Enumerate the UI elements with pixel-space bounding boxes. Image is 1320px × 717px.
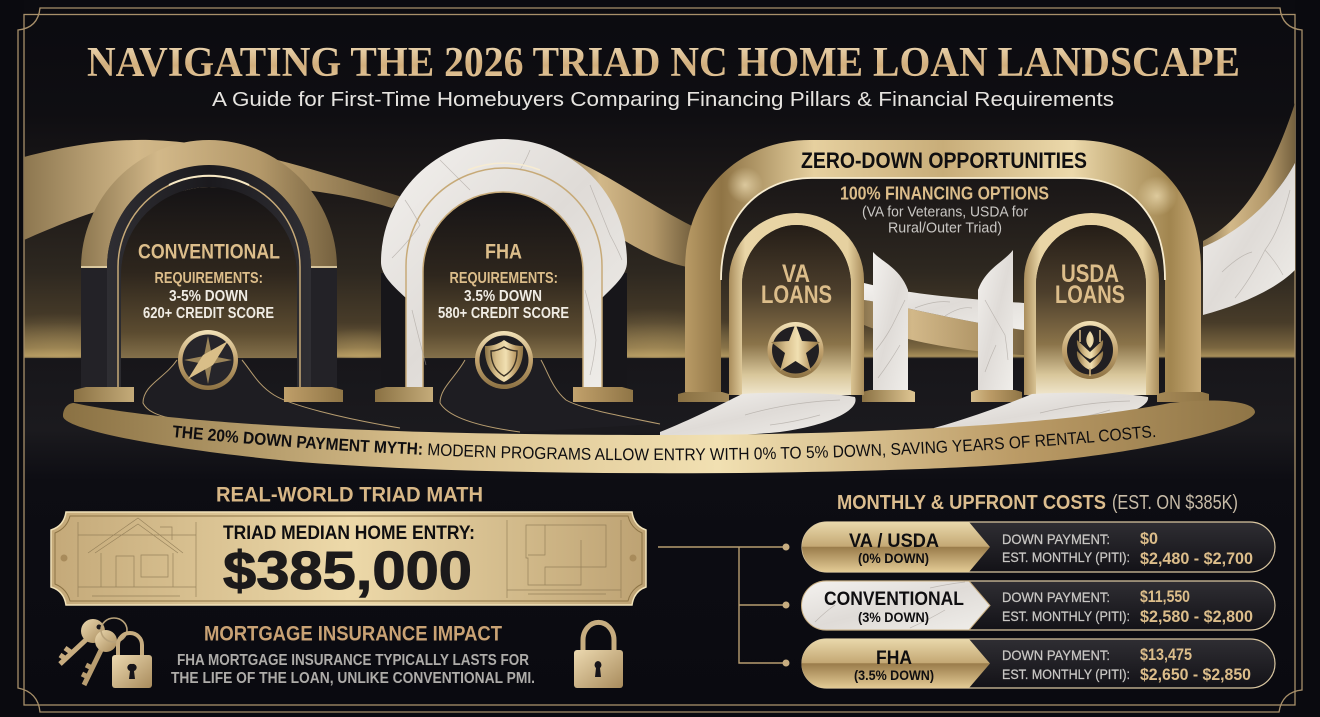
panel: price plaque <box>51 512 646 605</box>
icon: shield <box>475 331 533 389</box>
row: conventional costs: CONVENTIONAL <box>824 589 964 610</box>
marble floor paths <box>660 393 1148 436</box>
row: conventional costs: $11,550 <box>1140 587 1190 606</box>
requirements text: REQUIREMENTS: <box>154 270 263 287</box>
marble pillars <box>862 250 1022 402</box>
USDA label: USDA <box>1061 260 1119 288</box>
icon: house blueprint <box>78 518 196 597</box>
panel: FHA arch <box>375 139 633 402</box>
banner: 20% down payment myth <box>63 400 1255 474</box>
marble outer arch <box>381 139 627 392</box>
row: VA / USDA costs <box>802 522 1275 572</box>
row: conventional costs <box>802 581 1275 630</box>
financing text: 100% FINANCING OPTIONS <box>840 184 1049 204</box>
row: VA / USDA costs: (0% DOWN) <box>858 550 929 566</box>
plaque label: TRIAD MEDIAN HOME ENTRY: <box>223 523 475 544</box>
row: FHA costs <box>802 639 1275 688</box>
VA label: VA <box>782 260 810 288</box>
bases <box>74 387 343 402</box>
banner: 20% down payment myth: THE 20% DOWN PAYMENT MYTH: MODERN PROGRAMS ALLOW ENTRY WITH 0% TO 5% DOWN, SAVING YEARS OF RENTAL COSTS. <box>173 425 1156 460</box>
USDA label <box>1055 260 1125 309</box>
financing text <box>840 184 1049 236</box>
heading: FHA: FHA <box>485 240 522 264</box>
row: conventional costs: DOWN PAYMENT: <box>1002 589 1110 605</box>
subtitle: A Guide for First-Time Homebuyers Comparing Financing Pillars & Financial Requirements <box>212 89 1114 111</box>
flowing ribbons <box>24 103 1295 355</box>
heading: real-world triad math: REAL-WORLD TRIAD MATH <box>216 484 483 506</box>
sub-panel: VA loans <box>729 213 864 395</box>
row: conventional costs: $2,580 - $2,800 <box>1140 607 1253 626</box>
row: VA / USDA costs: $2,480 - $2,700 <box>1140 549 1253 568</box>
row: VA / USDA costs: DOWN PAYMENT: <box>1002 531 1110 547</box>
heading: monthly and upfront costs: MONTHLY & UPFRONT COSTS <box>837 492 1106 514</box>
row: FHA costs: $13,475 <box>1140 645 1192 664</box>
row: FHA costs: DOWN PAYMENT: <box>1002 647 1110 663</box>
row: FHA costs: $2,650 - $2,850 <box>1140 665 1251 684</box>
requirements text <box>143 270 274 322</box>
requirements text: REQUIREMENTS: <box>450 270 558 287</box>
black marble pillars <box>381 273 627 392</box>
heading: monthly and upfront costs: (EST. ON $385K) <box>1112 492 1238 514</box>
panel: zero-down arch <box>678 140 1209 402</box>
floor paths with gold outlines <box>143 358 660 432</box>
heading: mortgage insurance impact: MORTGAGE INSURANCE IMPACT <box>204 622 502 646</box>
big arch bases <box>678 392 1209 402</box>
financing text: Rural/Outer Triad) <box>888 219 1002 236</box>
icon: floor plan blueprint <box>507 520 621 598</box>
text block: mortgage insurance <box>171 652 535 687</box>
row: FHA costs: FHA <box>876 648 912 669</box>
requirements text <box>438 270 569 322</box>
row: conventional costs: (3% DOWN) <box>858 609 929 625</box>
row: VA / USDA costs: EST. MONTHLY (PITI): <box>1002 549 1130 565</box>
icon: wheat <box>1062 321 1118 379</box>
row: VA / USDA costs: $0 <box>1140 529 1158 548</box>
icon: padlock <box>574 622 623 688</box>
heading: conventional: CONVENTIONAL <box>138 240 280 264</box>
requirements text: 580+ CREDIT SCORE <box>438 305 569 322</box>
requirements text: 3.5% DOWN <box>464 288 542 305</box>
icon: compass <box>178 330 238 390</box>
text block: mortgage insurance: FHA MORTGAGE INSURANCE TYPICALLY LASTS FOR <box>177 652 529 669</box>
icon: keys and padlock <box>60 618 152 688</box>
financing text: (VA for Veterans, USDA for <box>862 203 1028 220</box>
USDA label: LOANS <box>1055 281 1125 309</box>
panel: conventional arch <box>74 140 343 402</box>
row: FHA costs: EST. MONTHLY (PITI): <box>1002 666 1130 682</box>
icon: key two <box>82 630 117 685</box>
requirements text: 620+ CREDIT SCORE <box>143 305 274 322</box>
row: conventional costs: EST. MONTHLY (PITI): <box>1002 608 1130 624</box>
icon: star <box>768 322 824 378</box>
requirements text: 3-5% DOWN <box>169 288 248 305</box>
row: FHA costs: (3.5% DOWN) <box>854 667 934 683</box>
VA label: LOANS <box>761 281 832 309</box>
text block: mortgage insurance: THE LIFE OF THE LOAN, UNLIKE CONVENTIONAL PMI. <box>171 670 535 687</box>
icon: key one <box>60 619 105 664</box>
price value: $385,000 <box>223 541 472 601</box>
gold outer arch <box>685 140 1201 392</box>
heading: zero-down: ZERO-DOWN OPPORTUNITIES <box>801 148 1087 173</box>
connector lines <box>658 544 790 666</box>
background <box>24 133 1294 462</box>
bases <box>375 387 633 402</box>
sub-panel: USDA loans <box>1024 213 1159 395</box>
title: NAVIGATING THE 2026 TRIAD NC HOME LOAN LANDSCAPE <box>87 40 1240 86</box>
row: VA / USDA costs: VA / USDA <box>849 531 939 552</box>
VA label <box>761 260 832 309</box>
gold outer arch <box>81 140 337 268</box>
